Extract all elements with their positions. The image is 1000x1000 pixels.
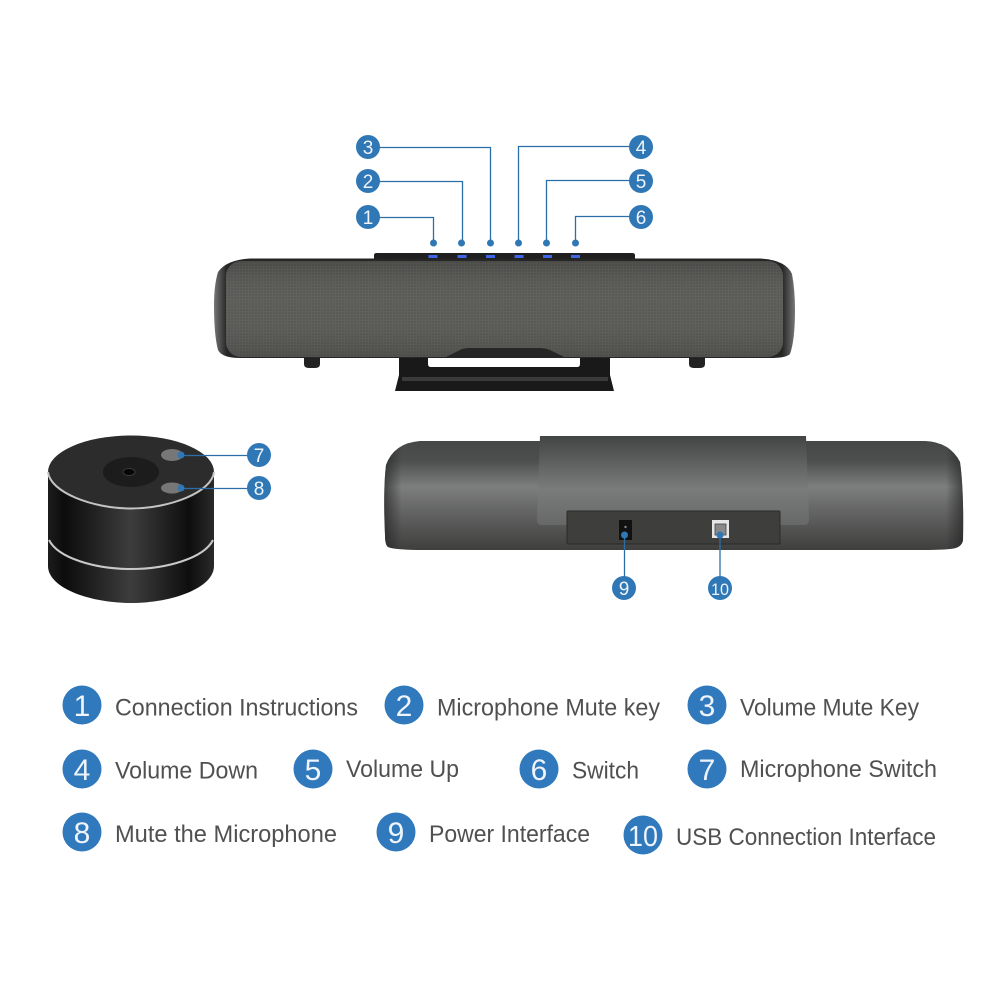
- callout 2: 2: [363, 172, 373, 193]
- indicator lights: [428, 255, 580, 258]
- front view of speaker bar: [214, 253, 795, 391]
- callout 4: 4: [636, 138, 647, 159]
- grille notch: [446, 348, 564, 357]
- legend item 2: Microphone Mute key: [437, 694, 660, 722]
- legend item 5: [294, 750, 459, 788]
- button mute: [161, 482, 183, 494]
- legend item 8: [62, 812, 337, 852]
- rubber foot right: [689, 356, 705, 368]
- stand lower band: [402, 377, 608, 381]
- rear end shading: [384, 441, 963, 550]
- legend: [62, 686, 937, 854]
- legend item 5: 5: [305, 754, 321, 787]
- legend item 4: Volume Down: [115, 758, 258, 784]
- rear view of speaker bar: [384, 436, 963, 550]
- legend item 4: 4: [74, 754, 90, 787]
- puck top: [48, 436, 214, 508]
- port plate: [567, 511, 780, 544]
- mounting stand: [395, 355, 614, 391]
- callout 5: 5: [636, 172, 646, 193]
- callout 5: [543, 169, 653, 246]
- legend item 4: [62, 750, 258, 788]
- puck top rim: [48, 472, 214, 508]
- legend item 3: [688, 686, 919, 724]
- top control strip: [374, 253, 635, 260]
- rubber foot left: [304, 356, 320, 368]
- callout 8: [178, 476, 271, 500]
- rear body: [384, 441, 963, 550]
- callout 8: 8: [254, 479, 264, 500]
- legend item 1: [62, 686, 358, 724]
- legend item 3: Volume Mute Key: [740, 694, 919, 722]
- puck silver ring: [49, 540, 213, 569]
- legend item 8: 8: [74, 817, 90, 850]
- stand slot: [428, 356, 580, 367]
- callout 6: 6: [636, 208, 646, 229]
- callout 2: [356, 169, 465, 246]
- legend item 7: Microphone Switch: [740, 756, 937, 783]
- callout 9: 9: [619, 579, 629, 600]
- round microphone puck: [48, 436, 214, 603]
- puck centre microphone: [103, 457, 159, 487]
- callout 3: 3: [363, 138, 373, 159]
- callout 10: [708, 532, 732, 600]
- legend item 9: 9: [388, 817, 404, 850]
- rear hinge panel: [537, 436, 809, 525]
- speaker grille: [226, 261, 783, 357]
- callouts above speaker bar: [356, 135, 653, 246]
- legend item 9: [376, 812, 590, 852]
- legend item 3: 3: [699, 690, 715, 723]
- puck body: [48, 472, 214, 603]
- legend item 10: 10: [628, 821, 658, 853]
- button power: [161, 449, 183, 461]
- legend item 9: Power Interface: [429, 821, 590, 848]
- callout 6: [572, 205, 653, 246]
- legend item 7: [688, 750, 937, 788]
- legend item 2: 2: [396, 690, 412, 723]
- speaker case: [214, 258, 795, 358]
- callout 9: [612, 532, 636, 600]
- legend item 6: [520, 750, 639, 788]
- legend item 10: [624, 816, 936, 854]
- legend item 5: Volume Up: [346, 756, 459, 783]
- legend item 1: 1: [74, 690, 90, 723]
- legend item 6: Switch: [572, 758, 639, 784]
- legend item 6: 6: [531, 754, 547, 787]
- callout 1: [356, 205, 437, 246]
- callout 10: 10: [711, 580, 729, 599]
- callout 4: [515, 135, 653, 246]
- legend item 7: 7: [699, 754, 715, 787]
- legend item 1: Connection Instructions: [115, 694, 358, 722]
- callout 7: 7: [254, 446, 264, 467]
- legend item 8: Mute the Microphone: [115, 821, 337, 848]
- power port: [619, 520, 632, 540]
- legend item 10: USB Connection Interface: [676, 824, 936, 851]
- callout 7: [178, 443, 271, 467]
- legend item 2: [384, 686, 660, 724]
- USB port: [712, 520, 729, 538]
- callout 3: [356, 135, 494, 246]
- callout 1: 1: [363, 208, 373, 229]
